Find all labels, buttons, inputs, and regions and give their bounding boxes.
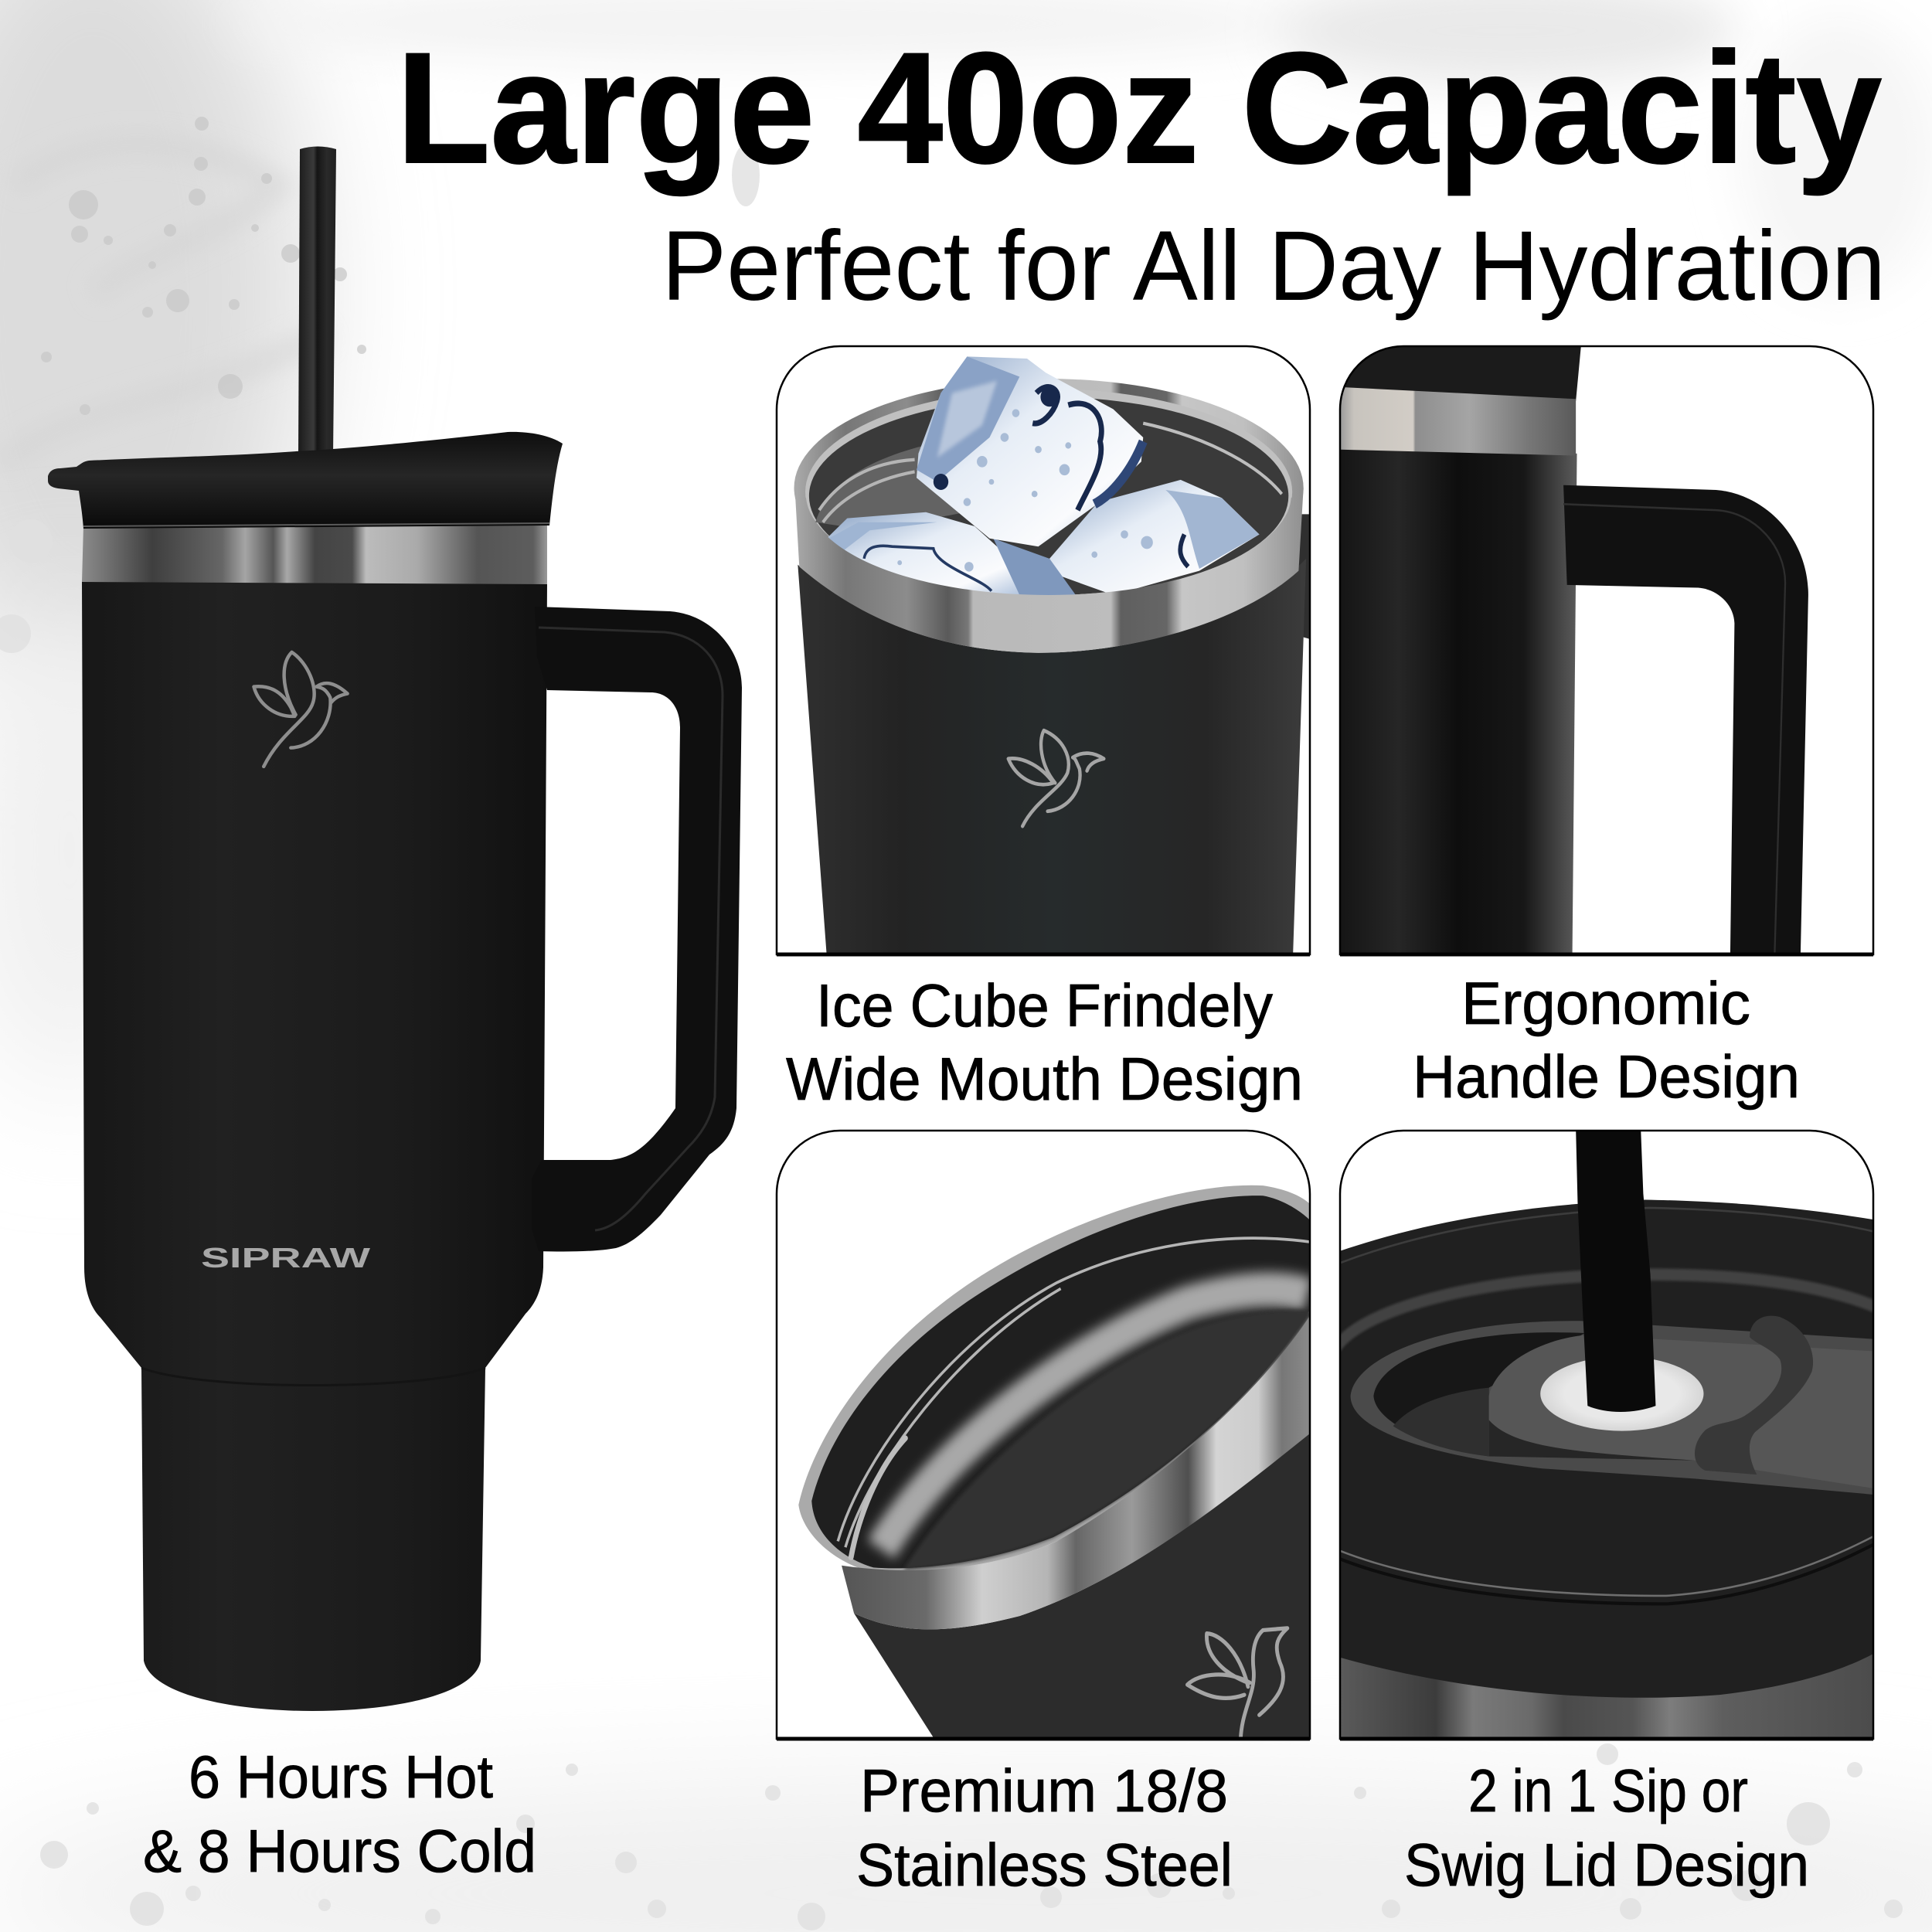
oval plate <box>1351 1321 1876 1495</box>
ice cubes <box>828 512 1019 594</box>
straw <box>1576 1129 1655 1412</box>
slider plate <box>1489 1335 1876 1488</box>
brand wordmark: SIPRAW <box>201 1242 370 1274</box>
tumbler body <box>1336 445 1577 957</box>
title: Large 40oz Capacity <box>396 20 1882 196</box>
panel: ergonomic handle <box>1336 345 1873 957</box>
oval well <box>1373 1332 1585 1457</box>
interior <box>811 1196 1311 1568</box>
handle stub <box>1298 514 1309 638</box>
lid <box>48 432 563 529</box>
caption: lid: 2 in 1 Sip or <box>1468 1757 1748 1825</box>
caption: handle: Ergonomic <box>1461 969 1750 1037</box>
panel: stainless steel rim <box>777 1131 1311 1743</box>
handle <box>532 607 742 1252</box>
steel ring <box>82 526 547 584</box>
tumbler side <box>798 559 1306 954</box>
front rim band <box>794 488 1304 653</box>
caption: hours hot and cold: & 8 Hours Cold <box>143 1817 536 1885</box>
caption: ice cube <box>786 971 1303 1113</box>
caption: lid <box>1404 1757 1809 1899</box>
caption: stainless steel <box>856 1757 1233 1899</box>
panel: sip or swig lid <box>1336 1129 1876 1743</box>
lid <box>1336 345 1581 401</box>
interior floor <box>903 1310 1311 1570</box>
caption: hours hot and cold: 6 Hours Hot <box>189 1743 493 1811</box>
steel ring <box>1336 387 1576 456</box>
tumbler body <box>82 582 547 1711</box>
thread lines <box>838 1238 1311 1547</box>
tumbler side <box>854 1428 1311 1743</box>
bird logo <box>1187 1628 1287 1743</box>
bird logo <box>1009 730 1104 826</box>
caption: stainless steel: Stainless Steel <box>856 1831 1233 1899</box>
handle <box>1563 485 1808 957</box>
caption: stainless steel: Premium 18/8 <box>860 1757 1228 1825</box>
rim back <box>794 379 1304 597</box>
base shadow line <box>141 1368 485 1385</box>
caption: hours hot and cold <box>143 1743 536 1885</box>
caption: ice cube: Ice Cube Frindely <box>816 971 1273 1039</box>
handle highlight <box>539 628 723 1230</box>
lid base <box>1336 1199 1876 1743</box>
gasket ring <box>1540 1356 1703 1431</box>
lower lid shoulder <box>1336 1536 1876 1596</box>
thread slot <box>851 1438 905 1557</box>
main tumbler product <box>48 147 742 1711</box>
interior wall highlight <box>881 1289 1308 1549</box>
mug interior <box>809 397 1288 595</box>
caption: handle: Handle Design <box>1413 1043 1800 1111</box>
swing handle <box>1695 1316 1813 1475</box>
bird logo <box>253 652 348 767</box>
caption: handle <box>1413 969 1800 1111</box>
rim outer <box>798 1185 1311 1573</box>
caption: lid: Swig Lid Design <box>1404 1831 1809 1899</box>
subtitle: Perfect for All Day Hydration <box>662 211 1886 321</box>
steel band <box>842 1313 1311 1629</box>
panel: ice cube wide mouth <box>777 346 1311 954</box>
steel collar <box>1336 1652 1876 1743</box>
caption: ice cube: Wide Mouth Design <box>786 1045 1303 1113</box>
straw <box>298 147 336 456</box>
